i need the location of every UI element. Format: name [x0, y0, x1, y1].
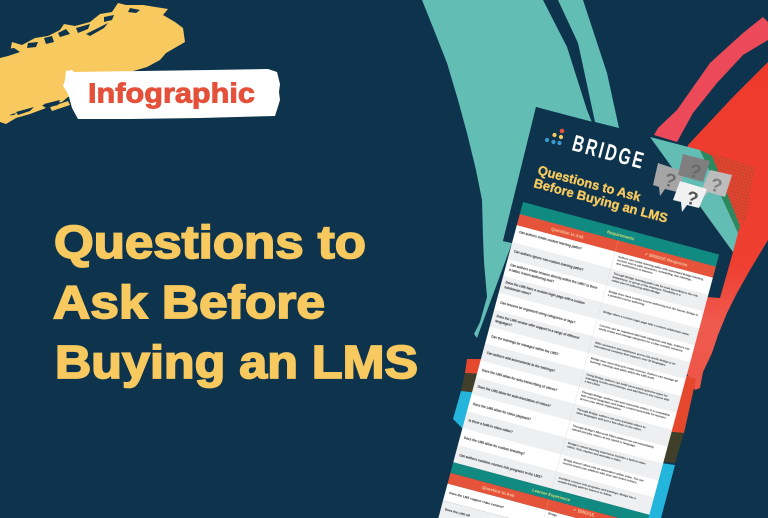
icon: right grey bubble: ? — [708, 175, 724, 198]
table rows: requirements: and notifications to learners. — [616, 261, 654, 275]
table rows: requirements — [453, 225, 713, 515]
table rows: requirements: Through Bridge, authors can auto-transcribe videos. It is compatible — [581, 390, 671, 417]
table rows: requirements: Can authors combine courses into programs in the LMS? — [459, 453, 543, 479]
table section: requirements — [453, 202, 719, 515]
table rows: requirements: Combine courses into programs and trainings. Bridge has a — [558, 476, 637, 500]
title: Buying an LMS — [55, 336, 418, 388]
infographic document preview — [438, 107, 740, 518]
table rows: requirements: Lessons can be organized with both categories and tags. Authors can — [599, 323, 690, 351]
table rows: requirements: mobile-friendly path for learners to follow. — [557, 479, 613, 498]
table rows: requirements: other languages with just a few clicks in the editor. — [576, 411, 642, 432]
logo wordmark: BRIDGE — [569, 131, 648, 175]
table rows: learner experience: Does the LMS off — [444, 507, 471, 518]
table rows: requirements: native part of authoring within Bridge. — [611, 278, 661, 295]
questions table — [438, 202, 719, 518]
table rows: requirements: Bridge offers a custom login page with a custom subdomain name. — [603, 310, 690, 337]
table rows: requirements: Bridge's robust learning experience includes a built-in video — [568, 441, 646, 466]
table section header: learner experience — [448, 462, 649, 518]
table rows: requirements: learning, trainings and paths within the LMS itself. — [590, 359, 655, 381]
table rows: requirements: custom brand your platform with your own brand colours. — [562, 461, 638, 485]
yellow brush stroke — [0, 3, 185, 124]
table rows: requirements: Does the LMS allow for auto-translation of videos? — [477, 385, 551, 408]
icon: centre dark bubble: ? — [687, 161, 703, 184]
table rows: requirements: upload and play videos at any speed or language. — [571, 427, 636, 448]
table rows: requirements: a native lesson-authoring tool? — [508, 268, 555, 284]
document side strips, right — [625, 370, 696, 518]
table rows: requirements: a few clicks. — [584, 379, 601, 387]
table rows: requirements: Can authors add assessments to the trainings? — [486, 351, 556, 373]
title: Ask Before — [53, 276, 325, 328]
table section header: requirements: Requirements — [607, 229, 635, 242]
table rows: requirements: Through Bridge, authors can auto-translate videos to — [577, 407, 646, 429]
table rows: requirements: Is there a built-in video editor? — [468, 418, 513, 434]
table rows: requirements: Does the LMS have a custom login page with a custom — [505, 280, 585, 305]
table section header: learner experience: Learner Experience — [532, 487, 571, 502]
table rows: requirements: a powerful course authoring. — [607, 293, 646, 307]
table rows: requirements: languages? — [495, 319, 513, 327]
table rows: learner experience — [438, 484, 576, 518]
logo dots — [545, 129, 564, 145]
table section header: requirements: ✓ BRIDGE Response — [644, 251, 689, 268]
table rows: requirements: custom course path structures, scheduling, due trainings, — [617, 258, 693, 282]
table rows: requirements: international company that supports over 20 languages. — [594, 344, 667, 367]
table rows: requirements: Does the LMS allow for video playback? — [473, 402, 531, 421]
table rows: requirements: Does the LMS vendor offer support in a range of different — [496, 314, 580, 340]
pink-red brush band — [654, 17, 768, 142]
table rows: requirements: Using Bridge, authors can build assessment question types for — [586, 372, 669, 398]
icon: front white bubble: ? — [684, 188, 700, 211]
table rows: requirements: subdomain name? — [504, 285, 532, 296]
table rows: requirements: Through Bridge, learning paths can be used according to the role, — [613, 271, 699, 298]
document heading: Questions to Ask — [536, 162, 643, 205]
green corner accent — [700, 150, 740, 233]
orange mesh texture — [700, 150, 755, 225]
table rows: requirements: Does the LMS allow for custom branding? — [463, 436, 525, 456]
table rows: requirements: across your whole organization. — [580, 397, 622, 412]
title: Questions to — [54, 216, 366, 268]
table rows: requirements: department, or group of the employee. Flexibility is a — [612, 275, 682, 297]
table rows: requirements: Offer customers and employees across the world, Bridge is an — [595, 341, 676, 366]
table rows: requirements: Does the LMS allow for auto-transcribing of videos? — [482, 368, 558, 392]
badge: Infographic — [63, 69, 280, 119]
table rows: requirements: Can authors create custom learning paths? — [519, 230, 582, 251]
document side strips, left — [453, 359, 485, 432]
table rows: requirements: Can authors ignore non-custom learning paths? — [513, 249, 584, 272]
table section: learner experience — [438, 462, 649, 518]
table section header: requirements — [517, 202, 719, 278]
speech bubble icons — [653, 154, 732, 212]
table rows: requirements: easily create and manage categories for a clear content structure. — [598, 327, 684, 353]
table rows: learner experience: Does the LMS support video content? — [449, 491, 504, 509]
table rows: requirements: Through Bridge's Microsoft Video platform we can immediately — [572, 424, 655, 449]
table rows: requirements: Can lessons be organized using categories or tags? — [500, 301, 576, 325]
teal corner accent — [650, 137, 738, 252]
table rows: requirements: Can the trainings be managed within the LMS? — [491, 334, 559, 356]
table rows: learner experience: Bridge — [548, 511, 558, 517]
table rows: requirements: Bridge doesn't allow only an automation within video. You can — [563, 457, 645, 483]
table rows: requirements: Bridge does have a native course-authoring tool. No hassle. Bridge is — [608, 289, 699, 317]
table section header: requirements: Question to Ask — [551, 226, 585, 240]
badge: Infographic: Infographic — [88, 78, 255, 108]
table section header: learner experience: Question to Ask — [481, 485, 516, 498]
table rows: requirements: Can authors create lessons directly within the LMS? Is there — [510, 263, 598, 290]
document heading: Before Buying an LMS — [532, 175, 670, 226]
document header panel — [503, 107, 733, 298]
table rows: requirements: with several languages and makes content accessible for learners — [580, 393, 667, 420]
table section header: learner experience: ✓ BRIDGE — [573, 507, 595, 518]
table rows: requirements: Authors can create learning paths with automated Bridge learning, — [618, 255, 704, 281]
table rows: requirements: Bridge does more than just create courses. Authors can manage all — [590, 356, 678, 383]
table rows: requirements: editor. Trim, caption and annotate a video. — [567, 444, 622, 463]
icon: left grey bubble: ? — [662, 170, 678, 193]
table rows: requirements: managing results and trainings, and add them to any course with — [585, 376, 670, 402]
title — [53, 216, 418, 388]
teal brush stroke — [422, 0, 619, 338]
red brush stroke — [650, 62, 768, 390]
